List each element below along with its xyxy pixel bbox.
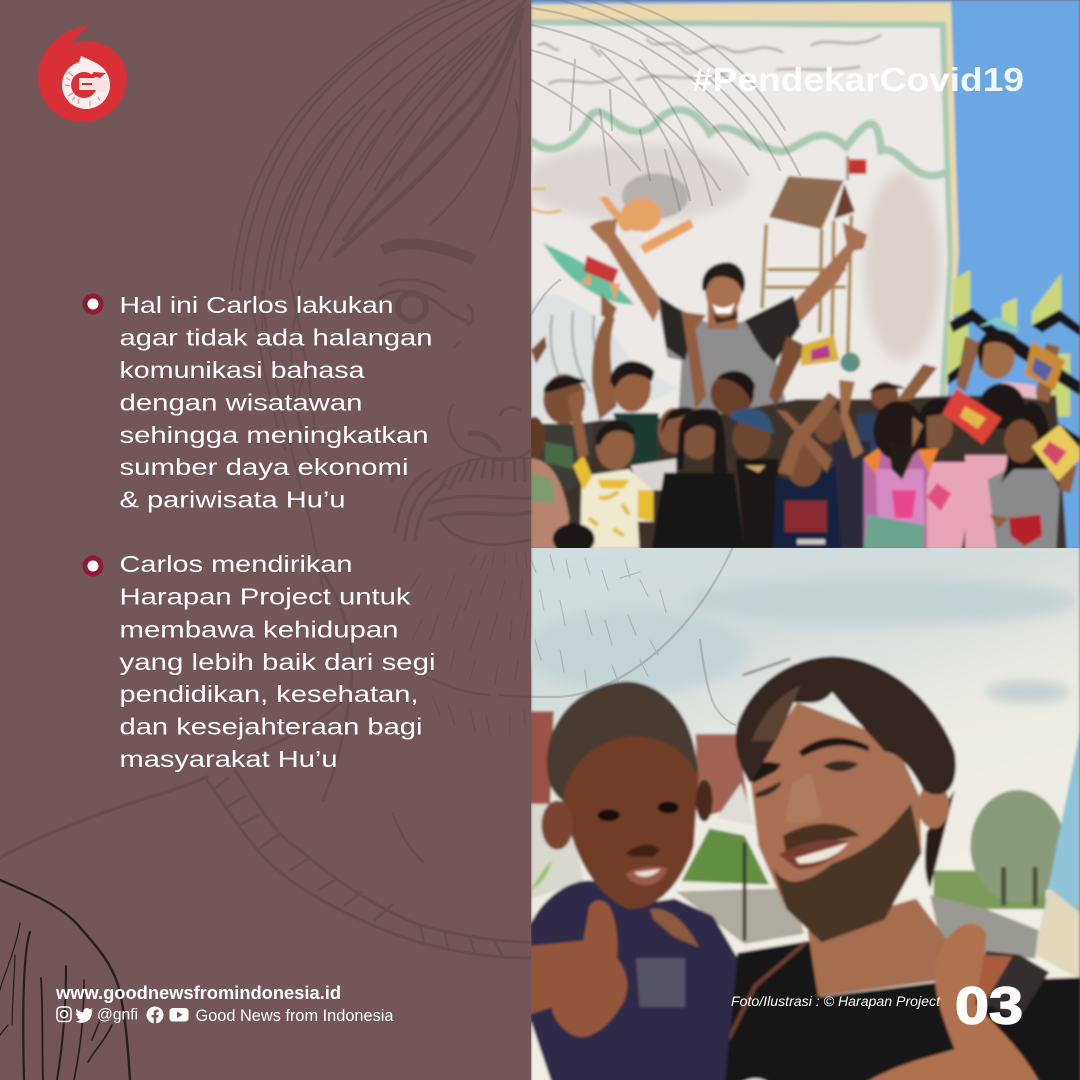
heading: hashtag: #PendekarCovid19: [692, 62, 1024, 99]
text block: second point: [120, 551, 436, 772]
text block: second point: masyarakat Hu’u: [120, 746, 338, 772]
picture books: [942, 389, 1002, 445]
page number: 03: [955, 978, 1023, 1036]
man's eyes and eyebrows: [746, 738, 869, 783]
footer: social handles: [57, 1006, 394, 1025]
boy's hair: [547, 682, 698, 801]
logo: Good News from Indonesia: [38, 26, 127, 122]
shirt graphic: [738, 1078, 776, 1080]
child: right background: [871, 382, 899, 410]
photo background: mural interior: [531, 24, 949, 426]
photo background: mural green border: [531, 18, 954, 398]
man's face: [750, 703, 921, 941]
child: blue cap boy: [736, 459, 783, 549]
icon: instagram: [57, 1007, 71, 1022]
sketch illustration: elephant shoulder: [0, 880, 130, 1080]
right wall: yellow and black zigzags: [948, 270, 1080, 452]
child: girl top right: [986, 382, 1037, 399]
sketch illustration: bearded face: [0, 0, 531, 960]
child: long hair girl in grey shirt: [988, 466, 1060, 549]
child: boy beside man's waist: [711, 372, 754, 416]
man's nose shadow: [785, 773, 822, 823]
sketch overlay on photos: [0, 0, 800, 958]
child: hidden girl behind book: [965, 455, 1007, 549]
photo: Carlos holding a small boy: [524, 545, 1080, 1080]
text block: first point: sumber daya ekonomi: [120, 454, 408, 480]
mural: house on stilts: [762, 156, 866, 372]
text block: second point: Harapan Project untuk: [120, 584, 411, 610]
text block: first point: dengan wisatawan: [120, 390, 362, 416]
man's thumbs-up hand: [850, 924, 1046, 1080]
man's moustache and lips: [783, 824, 860, 857]
blue painted flag edge: [1035, 731, 1080, 979]
child: smiling boy back row: [613, 413, 659, 466]
boy's shirt: [531, 881, 738, 1080]
child: centre small face: [814, 407, 843, 444]
child: girl with colourful shirt: [864, 448, 934, 549]
icon: youtube: [170, 1008, 188, 1022]
handle text: @gnfi: [97, 1006, 138, 1024]
sky: [531, 545, 1080, 1080]
text block: second point: Carlos mendirikan: [120, 551, 352, 577]
boy's eyes, nose and mouth: [598, 809, 620, 821]
crowd base shadow: [531, 396, 1067, 549]
child: navy shirt boy with crossed arms: [773, 466, 841, 549]
photo credit: Foto/Ilustrasi : © Harapan Project: [731, 994, 941, 1009]
man's neck: [808, 899, 948, 997]
photo: Carlos with children in front of mural: [524, 0, 1080, 555]
text block: second point: pendidikan, kesehatan,: [120, 681, 418, 707]
text block: first point: agar tidak ada halangan: [120, 324, 432, 350]
child: white shirt behind: [631, 459, 676, 490]
group of children: [524, 294, 1080, 555]
mural: handwriting: [538, 35, 881, 84]
child: bottom head: [551, 522, 596, 548]
text block: first point: & pariwisata Hu’u: [120, 486, 346, 512]
text block: second point: membawa kehidupan: [120, 616, 398, 642]
man's beard: [773, 804, 921, 942]
man's ear and back hair: [925, 790, 955, 888]
photo background: cream painted frame: [531, 0, 961, 398]
icon: facebook: [146, 1006, 164, 1023]
bag strap: [729, 942, 806, 1039]
text block: second point: dan kesejahteraan bagi: [120, 714, 422, 740]
boy's thumbs-up hand: [531, 901, 627, 1037]
child: multicoloured shirt far left: [531, 459, 570, 549]
man's black t-shirt: [720, 941, 1080, 1080]
page name: Good News from Indonesia: [196, 1006, 394, 1025]
roofs and building: [531, 711, 804, 944]
man with raised arms: [590, 219, 867, 420]
text block: first point: [120, 292, 432, 512]
child: pink shirt girl: [927, 462, 972, 549]
child: black shirt girl: [652, 473, 745, 549]
mural: surfing boy: [531, 173, 694, 305]
mural: green waves: [531, 110, 948, 176]
text block: second point: yang lebih baik dari segi: [120, 649, 436, 675]
icon: twitter: [76, 1008, 93, 1023]
bullet: second point: [82, 556, 104, 576]
bullet: first point: [82, 294, 104, 314]
backpack strap: [972, 951, 1049, 1021]
text block: first point: sehingga meningkatkan: [120, 422, 428, 448]
text block: first point: Hal ini Carlos lakukan: [120, 292, 394, 318]
mural: pale wave shell: [531, 295, 678, 420]
background panel: [0, 0, 531, 1080]
distant trees and road: [930, 790, 1065, 958]
child: dark shirt left: [538, 424, 594, 490]
photo background: blue wall: [531, 0, 1080, 549]
footer: website url: www.goodnewsfromindonesia.id: [55, 982, 341, 1003]
man's hair: [736, 656, 956, 794]
boy's head: [547, 683, 698, 909]
child: yellow shirt boy: [580, 469, 654, 549]
text block: first point: komunikasi bahasa: [120, 357, 366, 383]
